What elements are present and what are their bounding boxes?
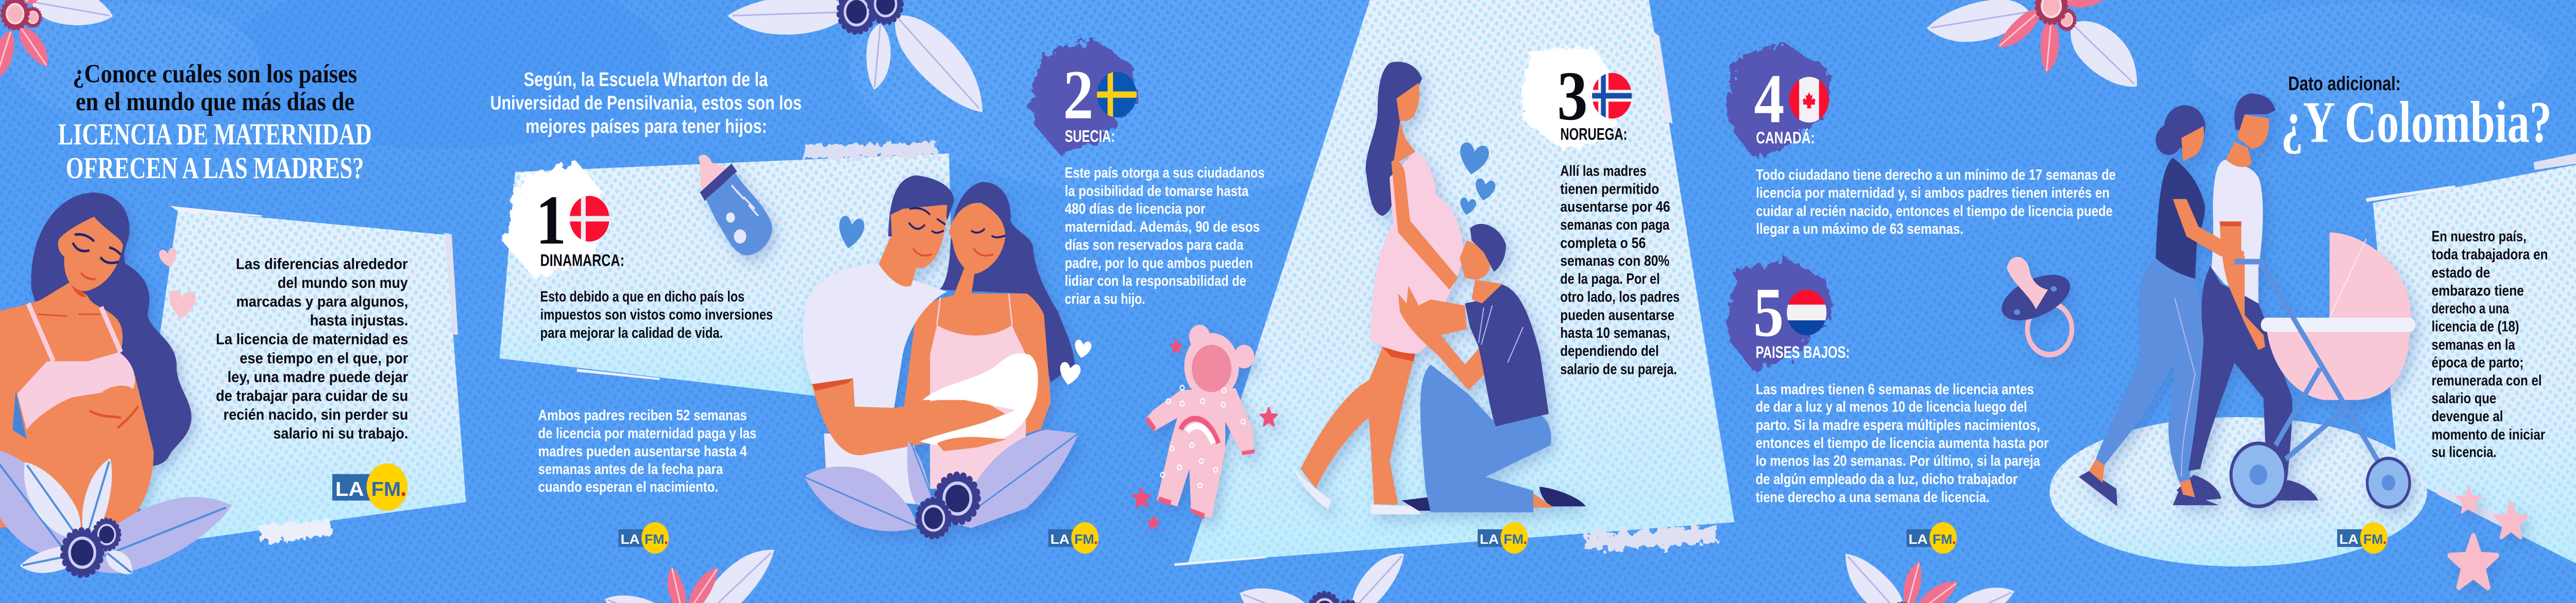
- text: Netherlands: tiene derecho a una semana de licencia.: [1756, 489, 1990, 505]
- text: Colombia: toda trabajadora en: [2432, 246, 2548, 263]
- text: Colombia: En nuestro país,: [2432, 228, 2527, 245]
- icon: pacifier: [1996, 257, 2075, 355]
- text: Netherlands: parto. Si la madre espera múltiples nacimientos,: [1756, 417, 2040, 433]
- title: ¿Conoce cuáles son los países: [73, 59, 357, 89]
- text: Norway: semanas con 80%: [1560, 252, 1669, 269]
- text: Norway: semanas con paga: [1560, 217, 1670, 233]
- flower: bottom Denmark: [601, 535, 784, 603]
- illustration: pregnant woman: [0, 193, 192, 527]
- text: both parents: Ambos padres reciben 52 semanas: [538, 407, 747, 423]
- flower: top left: [0, 0, 115, 83]
- text: both parents: [538, 407, 756, 495]
- text: Sweden: 480 días de licencia por: [1065, 200, 1206, 217]
- text: intro: salario ni su trabajo.: [273, 425, 408, 442]
- text: Canada: licencia por maternidad y, si ambos padres tienen interés en: [1756, 185, 2110, 201]
- text: Norway: Allí las madres: [1560, 163, 1647, 179]
- number 2: 2: [1063, 56, 1094, 133]
- logo: La FM Sweden: LA: [1050, 532, 1070, 547]
- text: Colombia: remunerada con el: [2432, 372, 2542, 389]
- logo: La FM Sweden: FM: [1074, 532, 1094, 547]
- text: both parents: semanas antes de la fecha para: [538, 461, 723, 477]
- title: LICENCIA DE MATERNIDAD: [58, 117, 372, 151]
- text: Sweden: Este país otorga a sus ciudadanos: [1065, 165, 1265, 181]
- flag: Sweden: [1096, 71, 1138, 118]
- logo: La FM intro: FM: [371, 478, 401, 501]
- logo: La FM Denmark: FM: [645, 532, 665, 547]
- text: Sweden: días son reservados para cada: [1065, 237, 1244, 253]
- text: Sweden: maternidad. Además, 90 de esos: [1065, 218, 1260, 235]
- label: Canada: CANADÁ:: [1756, 129, 1815, 147]
- country 4: Canada: [1754, 59, 2116, 237]
- panel: Denmark paper: [500, 142, 952, 398]
- logo: La FM Norway: [1478, 522, 1528, 554]
- text: Sweden: padre, por lo que ambos pueden: [1065, 255, 1253, 271]
- kicker: Dato adicional:: [2288, 73, 2401, 95]
- logo: La FM intro: [332, 463, 408, 511]
- text: Denmark: [540, 288, 773, 341]
- text: both parents: de licencia por maternidad paga y las: [538, 425, 756, 441]
- text: both parents: madres pueden ausentarse hasta 4: [538, 443, 747, 460]
- logo: La FM Norway: FM: [1504, 532, 1523, 547]
- text: both parents: cuando esperan el nacimiento.: [538, 478, 718, 495]
- text: Norway: ausentarse por 46: [1560, 198, 1670, 215]
- text: Norway: completa o 56: [1560, 235, 1646, 251]
- flower: bottom right: [1835, 542, 2019, 603]
- logo: La FM Denmark: [619, 522, 669, 554]
- text: Denmark: impuestos son vistos como inversiones: [540, 306, 773, 323]
- text: Colombia: momento de iniciar: [2432, 426, 2545, 443]
- text: Netherlands: entonces el tiempo de licencia aumenta hasta por: [1756, 435, 2048, 452]
- text: Sweden: criar a su hijo.: [1065, 290, 1145, 307]
- text: Canada: [1756, 166, 2116, 237]
- logo: La FM Netherlands: LA: [1909, 532, 1928, 547]
- text: Netherlands: Las madres tienen 6 semanas de licencia antes: [1756, 381, 2034, 398]
- text: Colombia: época de parto;: [2432, 354, 2523, 371]
- text: Norway: tienen permitido: [1560, 181, 1659, 197]
- panel: central paper: [1175, 0, 1734, 566]
- label: Suecia: SUECIA:: [1065, 128, 1115, 146]
- text: intro: hasta injustas.: [310, 312, 408, 329]
- heading: Wharton: Universidad de Pensilvania, estos son los: [490, 92, 802, 114]
- icon: baby bottle: [698, 155, 772, 255]
- text: Norway: de la paga. Por el: [1560, 270, 1660, 287]
- logo: La FM Colombia: LA: [2339, 532, 2359, 547]
- panel: Colombia paper: [2366, 153, 2576, 563]
- flower: top right: [1925, 0, 2150, 102]
- icon: pink stars: [2450, 488, 2527, 588]
- ground ellipse under family: [2049, 417, 2427, 566]
- flag: Denmark: [569, 195, 610, 243]
- logo: La FM Norway: LA: [1480, 532, 1499, 547]
- heading: Wharton: mejores países para tener hijos:: [526, 115, 767, 137]
- flag: Canada: [1789, 76, 1829, 124]
- text: intro: ese tiempo en el que, por: [240, 350, 408, 367]
- text: Sweden: [1065, 165, 1265, 307]
- number 3: 3: [1557, 57, 1588, 135]
- text: Norway: pueden ausentarse: [1560, 307, 1674, 323]
- brush: Netherlands: [1726, 257, 1832, 371]
- icon: blue heart: [836, 215, 866, 251]
- number 1: 1: [536, 181, 566, 259]
- text: intro: La licencia de maternidad es: [216, 331, 408, 348]
- illustration: couple with baby: [803, 176, 1078, 537]
- heading: Wharton: [490, 68, 802, 137]
- country 2: Sweden: [1063, 56, 1265, 307]
- text: Netherlands: [1756, 381, 2048, 505]
- title: [58, 59, 372, 185]
- illustration: baby onesie: [1133, 325, 1277, 529]
- text: Netherlands: de algún empleado da a luz, dicho trabajador: [1756, 471, 2018, 487]
- text: Norway: hasta 10 semanas,: [1560, 324, 1670, 341]
- logo: La FM Colombia: [2337, 522, 2387, 554]
- text: Colombia: derecho a una: [2432, 300, 2509, 317]
- text: intro: [216, 255, 408, 442]
- text: Colombia: [2432, 228, 2548, 460]
- text: Denmark: para mejorar la calidad de vida.: [540, 324, 723, 341]
- number 4: 4: [1754, 59, 1785, 137]
- brush: Canada: [1726, 44, 1832, 157]
- text: Denmark: Esto debido a que en dicho país los: [540, 288, 744, 305]
- country 1: Denmark: [540, 196, 773, 341]
- icon: white hearts: [1058, 339, 1092, 387]
- icon: blue hearts: [1457, 141, 1496, 216]
- panel: intro paper: [135, 206, 466, 544]
- flag: Netherlands: [1786, 289, 1827, 336]
- logo: La FM Netherlands: FM: [1933, 532, 1953, 547]
- label: Paises Bajos: PAISES BAJOS:: [1756, 343, 1850, 361]
- text: Colombia: salario que: [2432, 390, 2496, 406]
- text: Colombia: licencia de (18): [2432, 318, 2519, 335]
- icon: pink hearts: [158, 247, 196, 320]
- text: Sweden: la posibilidad de tomarse hasta: [1065, 183, 1249, 199]
- text: Netherlands: de dar a luz y al menos 10 de licencia luego del: [1756, 399, 2027, 415]
- text: intro: del mundo son muy: [278, 274, 408, 291]
- heading: Dato adicional: [2281, 73, 2552, 155]
- text: Norway: otro lado, los padres: [1560, 289, 1680, 305]
- flower: bottom left: [0, 428, 239, 588]
- text: intro: marcadas y para algunos,: [236, 293, 408, 310]
- text: intro: ley, una madre puede dejar: [227, 368, 408, 386]
- text: Colombia: su licencia.: [2432, 444, 2497, 460]
- text: Norway: salario de su pareja.: [1560, 361, 1677, 377]
- text: Netherlands: lo menos las 20 semanas. Por último, si la pareja: [1756, 453, 2040, 469]
- number 5: 5: [1753, 273, 1784, 351]
- text: Norway: dependiendo del: [1560, 342, 1659, 359]
- flower: bottom centre: [1234, 542, 1412, 603]
- logo: La FM Netherlands: [1907, 522, 1957, 554]
- flower: top Denmark: [727, 0, 998, 128]
- logo: La FM Colombia: FM: [2363, 532, 2383, 547]
- brush: Sweden: [1029, 39, 1138, 154]
- country 5: Netherlands: [1753, 273, 2048, 505]
- text: Colombia: estado de: [2432, 264, 2490, 281]
- text: intro: de trabajar para cuidar de su: [216, 387, 408, 404]
- logo: La FM Denmark: LA: [621, 532, 640, 547]
- text: intro: recién nacido, sin perder su: [224, 406, 408, 423]
- title: en el mundo que más días de: [76, 87, 354, 116]
- label: Dinamarca: DINAMARCA:: [540, 252, 624, 270]
- logo: La FM intro: LA: [335, 478, 364, 501]
- text: intro: Las diferencias alrededor: [236, 255, 408, 272]
- text: Sweden: lidiar con la responsabilidad de: [1065, 272, 1246, 289]
- text: Canada: llegar a un máximo de 63 semanas.: [1756, 220, 1963, 237]
- illustration: family with stroller: [2079, 93, 2415, 507]
- title: OFRECEN A LAS MADRES?: [66, 151, 364, 185]
- logo: La FM Sweden: [1048, 522, 1098, 554]
- text: Colombia: semanas en la: [2432, 336, 2515, 353]
- flag: Norway: [1591, 72, 1633, 119]
- country 3: Norway: [1557, 57, 1680, 377]
- text: Norway: [1560, 163, 1680, 377]
- label: Noruega: NORUEGA:: [1560, 126, 1628, 144]
- illustration: father kissing belly: [1292, 62, 1586, 514]
- heading: Wharton: Según, la Escuela Wharton de la: [524, 68, 768, 90]
- text: Colombia: devengue al: [2432, 408, 2503, 425]
- text: Canada: cuidar al recién nacido, entonces el tiempo de licencia puede: [1756, 203, 2113, 219]
- text: Colombia: embarazo tiene: [2432, 282, 2524, 299]
- text: Canada: Todo ciudadano tiene derecho a un mínimo de 17 semanas de: [1756, 166, 2116, 183]
